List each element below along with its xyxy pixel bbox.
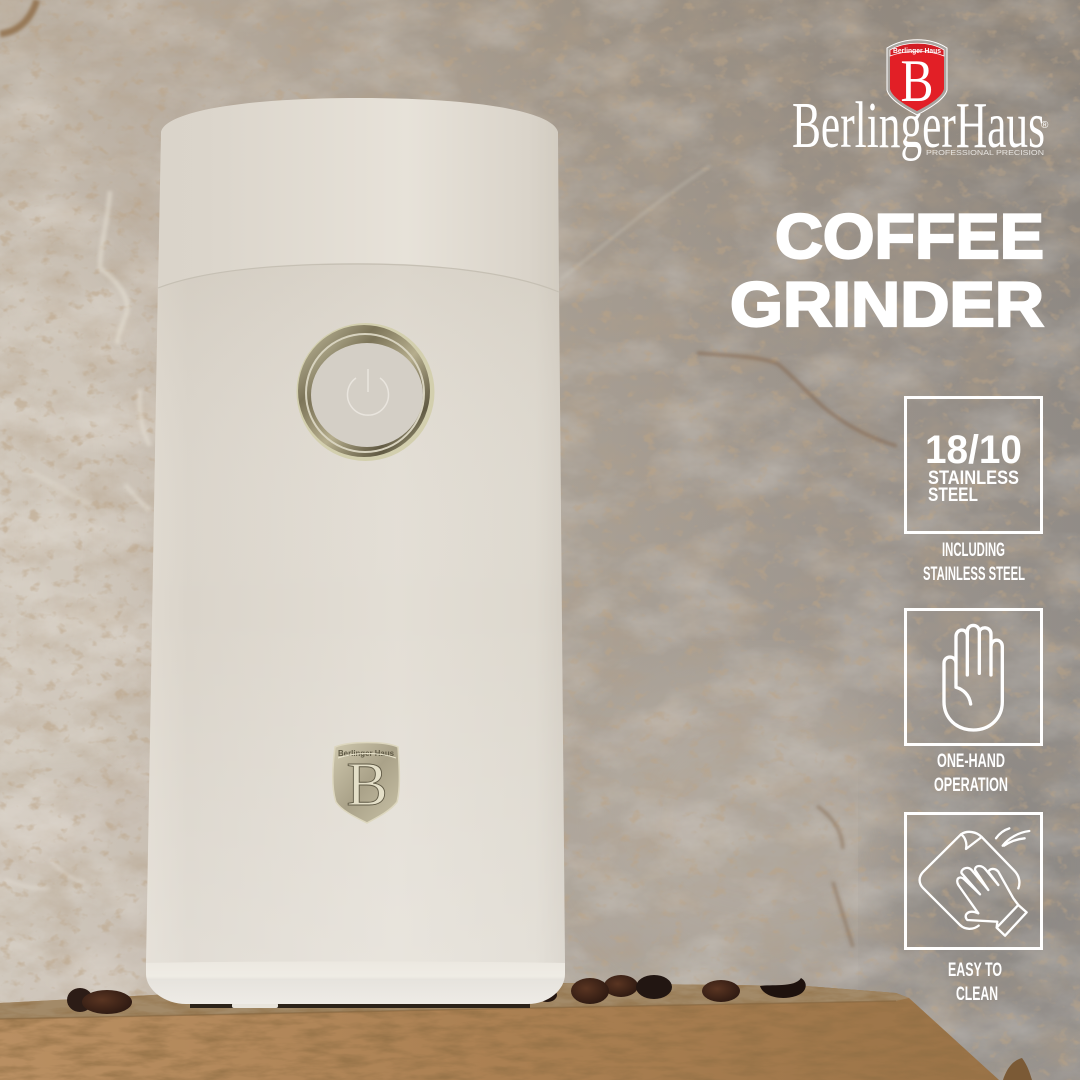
icon: red shield: B xyxy=(900,48,934,114)
caption: EASY TO xyxy=(948,960,1002,981)
logo: Berlinger Haus: ® xyxy=(1041,120,1049,131)
caption: ONE-HAND xyxy=(937,751,1005,772)
power button xyxy=(296,323,434,461)
icon: red shield: Berlinger Haus xyxy=(893,48,941,55)
feature: 18/10 stainless steel xyxy=(906,398,1042,585)
feature: 18/10 stainless steel: STEEL xyxy=(928,485,978,506)
caption xyxy=(923,540,1025,585)
grinder base xyxy=(146,962,565,1004)
feature: one-hand operation xyxy=(906,610,1042,796)
grinder body xyxy=(146,254,565,965)
grinder lid xyxy=(158,98,559,291)
wooden board xyxy=(0,980,1032,1080)
logo: Berlinger Haus xyxy=(792,40,1049,162)
grinder shadow and feet xyxy=(190,1003,530,1008)
caption: INCLUDING xyxy=(942,540,1005,561)
coffee beans xyxy=(67,975,806,1014)
caption xyxy=(934,751,1008,796)
caption xyxy=(948,960,1002,1005)
title: coffee grinder: COFFEE xyxy=(775,202,1044,272)
title: coffee grinder xyxy=(730,202,1044,340)
logo: Berlinger Haus: PROFESSIONAL PRECISION xyxy=(926,150,1044,157)
feature: easy to clean xyxy=(906,814,1042,1005)
title: coffee grinder: GRINDER xyxy=(730,270,1044,340)
icon: power symbol xyxy=(347,369,388,415)
icon: hand wiping with cloth xyxy=(920,828,1029,936)
gold brand badge: B xyxy=(346,751,388,819)
gold brand badge xyxy=(333,742,399,823)
feature: 18/10 stainless steel: 18/10 xyxy=(925,428,1022,472)
caption: OPERATION xyxy=(934,775,1008,796)
feature: 18/10 stainless steel: STAINLESS xyxy=(928,468,1019,489)
caption: CLEAN xyxy=(956,984,998,1005)
icon: red shield xyxy=(887,40,947,115)
gold brand badge: Berlinger Haus xyxy=(338,749,395,758)
icon: open hand xyxy=(944,625,1002,730)
product: coffee grinder xyxy=(146,98,565,1008)
